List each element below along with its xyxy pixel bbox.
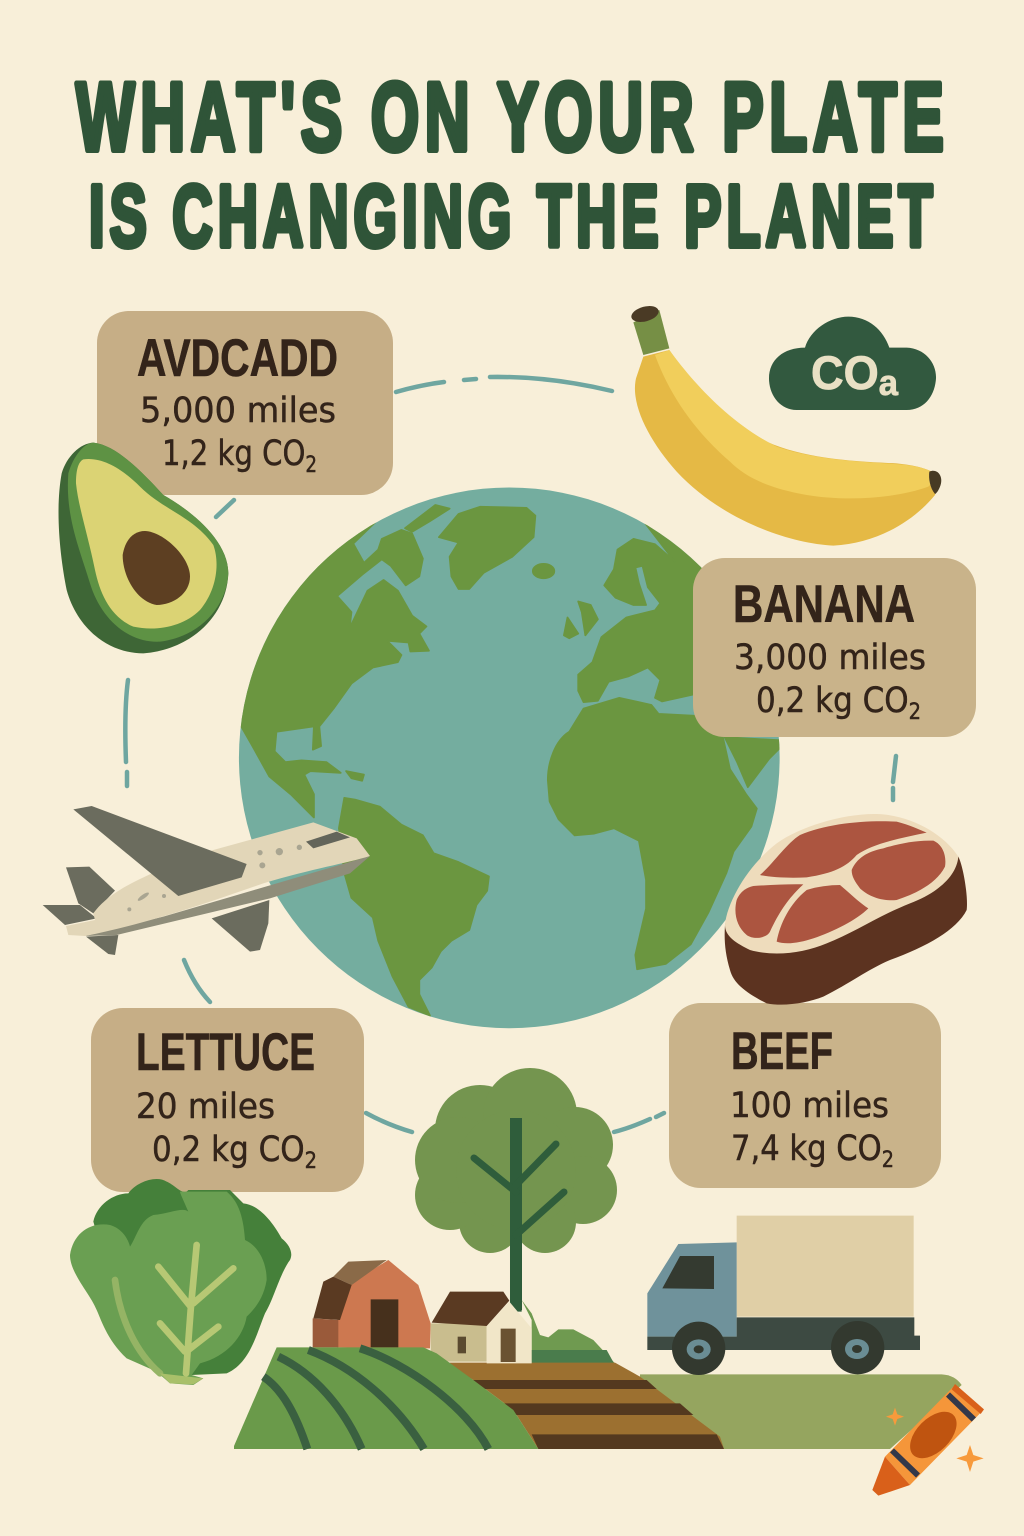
british isles [564, 617, 578, 638]
dashed route ring [125, 377, 896, 1132]
icon: banana [630, 303, 941, 546]
panel: lettuce: 0,2 kg CO [152, 1130, 324, 1170]
panel: banana: 2 [909, 700, 921, 725]
panel: lettuce: LETTUCE [136, 1023, 315, 1082]
south america [339, 798, 489, 1016]
brown plowed field [445, 1363, 724, 1449]
farm landscape [234, 1240, 962, 1449]
bush [522, 1300, 615, 1363]
arctic peninsula [405, 505, 450, 532]
icon: beef steak [725, 814, 967, 1005]
panel: lettuce [91, 1008, 364, 1192]
icon: sparkles [886, 1408, 984, 1472]
title [76, 63, 944, 265]
panel: lettuce: 2 [305, 1149, 317, 1174]
icon: avocado [59, 443, 228, 653]
eurasia [577, 524, 702, 703]
icon: delivery truck [647, 1216, 920, 1375]
icon: crayon [872, 1384, 984, 1496]
greenland [439, 507, 535, 589]
panel: avocado: 1,2 kg CO [162, 434, 334, 474]
cuba [346, 771, 364, 781]
icon: CO2 cloud: a [879, 362, 899, 403]
globe [237, 487, 787, 1028]
green striped field [234, 1347, 538, 1449]
title: WHAT'S ON YOUR PLATE [76, 63, 944, 171]
panel: beef: 100 miles [730, 1086, 889, 1126]
icon: tree [415, 1068, 617, 1310]
panel: banana: 3,000 miles [734, 638, 926, 678]
panel: lettuce: 20 miles [136, 1087, 275, 1127]
panel: avocado: AVDCADD [137, 329, 338, 388]
africa [548, 698, 757, 969]
barn [313, 1260, 431, 1348]
title: IS CHANGING THE PLANET [89, 169, 933, 265]
tree trunk base [510, 1240, 522, 1312]
icon: airplane [43, 806, 370, 955]
panel: avocado [97, 311, 393, 495]
right meadow [640, 1374, 962, 1449]
arabia [725, 737, 787, 787]
panel: beef: 7,4 kg CO [731, 1129, 903, 1169]
panel: banana [693, 558, 976, 737]
panel: beef: BEEF [731, 1022, 833, 1081]
panel: beef [669, 1003, 941, 1188]
icon: CO2 cloud: CO [811, 346, 882, 399]
panel: avocado: 5,000 miles [140, 391, 336, 431]
panel: banana: 0,2 kg CO [756, 681, 928, 721]
icon: CO2 cloud [769, 317, 936, 410]
iceland [533, 564, 554, 578]
icon: lettuce [70, 1179, 291, 1385]
panel: banana: BANANA [733, 575, 915, 634]
panel: beef: 2 [882, 1148, 894, 1173]
north america [237, 521, 429, 817]
farmhouse [431, 1292, 532, 1363]
panel: avocado: 2 [305, 453, 317, 478]
